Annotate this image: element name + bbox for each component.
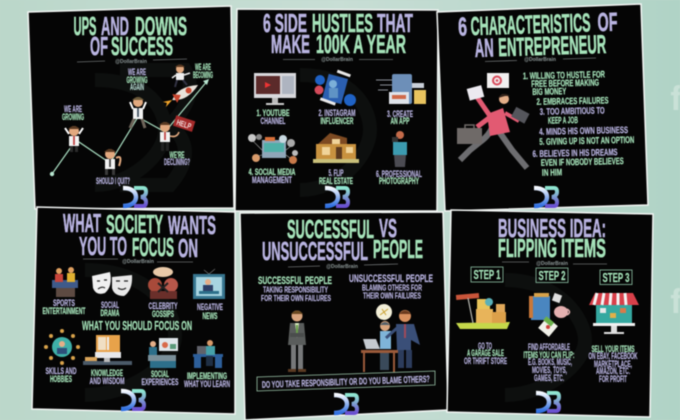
figure: successful man (288, 310, 306, 372)
panel: flipping items (447, 210, 653, 417)
watermark logo (95, 70, 190, 185)
label: celebrity gossips (148, 301, 178, 319)
step 2 text: E.G. BOOKS, MUSIC, (528, 357, 572, 367)
title (458, 7, 619, 64)
label: instagram influencer: 2. INSTAGRAM (318, 108, 356, 118)
step 1 text: GO TO (478, 341, 492, 351)
step 1 text (464, 341, 507, 366)
handle: @DollarBrain (115, 59, 147, 65)
panel: ups and downs of success: GROWING (62, 112, 84, 122)
icon: online shop (589, 293, 639, 334)
title (263, 8, 413, 59)
logo (334, 395, 357, 413)
help sign (173, 115, 195, 132)
label: skills and hobbies: HOBBIES (50, 374, 72, 384)
label: social media management (248, 167, 296, 185)
label: professional photography: PHOTOGRAPHY (379, 176, 419, 186)
icon: house (313, 133, 359, 163)
icon: briefcase (457, 125, 482, 144)
step 2 text: ITEMS YOU CAN FLIP: (524, 350, 574, 360)
label: we are becoming (193, 62, 213, 80)
step 2 text: FIND AFFORDABLE (528, 342, 570, 352)
step 3 text (588, 344, 638, 384)
icon: target card (487, 73, 509, 88)
title: THAT (377, 8, 413, 38)
label: sports entertainment: ENTERTAINMENT (42, 306, 86, 316)
figure on rocket (172, 64, 190, 87)
label: social drama (100, 300, 120, 318)
label: we are growing again: WE ARE (128, 67, 146, 77)
label: instagram influencer: INFLUENCER (320, 116, 354, 126)
numbered list of characteristics: 4. MINDS HIS OWN BUSINESS (539, 125, 628, 138)
help sign: HELP (175, 118, 193, 131)
step 3 text: MARKETPLACE, (594, 359, 632, 369)
icon: garage sale boxes (456, 293, 510, 329)
label: skills and hobbies: SKILLS AND (46, 366, 77, 376)
label: celebrity gossips: GOSSIPS (152, 309, 174, 319)
icon: sports fans (52, 267, 78, 297)
logo (123, 188, 146, 206)
chart line: ups and downs (50, 79, 209, 176)
numbered list of characteristics: IN HIM (542, 167, 562, 179)
title: VS (379, 213, 397, 243)
icon: celebrity gossip (148, 267, 178, 299)
title: FOCUS (132, 232, 174, 262)
step 2 heading (536, 268, 568, 283)
unsuccessful column heading: BLAMING OTHERS FOR (362, 282, 422, 292)
numbered list of characteristics: 2. EMBRACES FAILURES (536, 95, 609, 108)
label: flip real estate (319, 168, 353, 186)
logo (121, 391, 144, 409)
label: create an app (387, 109, 413, 126)
title (498, 213, 606, 263)
label: knowledge and wisdom (90, 368, 124, 386)
title: 6 SIDE (263, 8, 307, 38)
label: flip real estate: 5. FLIP (328, 168, 344, 178)
step 1 heading (471, 267, 503, 282)
label: knowledge and wisdom: AND WISDOM (90, 376, 124, 386)
label: sports entertainment: SPORTS (53, 298, 75, 308)
title (74, 11, 187, 61)
numbered list of characteristics: 3. TOO AMBITIOUS TO (540, 105, 605, 118)
handle (502, 261, 607, 267)
title: ITEMS (561, 233, 606, 263)
handle: @DollarBrain (536, 261, 568, 267)
label: social media management: MANAGEMENT (252, 175, 292, 185)
title: SOCIETY (106, 209, 163, 239)
unsuccessful column heading: UNSUCCESSFUL PEOPLE (349, 273, 433, 285)
label: social experiences (142, 369, 178, 387)
label: social drama: SOCIAL (101, 300, 119, 310)
thought bubble (376, 304, 392, 320)
step 3 heading: STEP 3 (602, 270, 630, 285)
figure: running businessman (460, 94, 527, 168)
step 2 text: MOVIES, TOYS, (532, 365, 567, 375)
handle (283, 57, 393, 63)
unsuccessful column heading: THEIR OWN FAILURES (363, 290, 421, 300)
figure: should I quit (104, 149, 120, 175)
handle: @DollarBrain (321, 57, 353, 63)
step 2 text: GAMES, ETC. (534, 373, 564, 383)
icon: theatre masks (92, 272, 132, 296)
icon: items to flip (529, 293, 570, 337)
label: create an app: 3. CREATE (387, 109, 413, 119)
label: we are growing: WE ARE (64, 104, 82, 114)
label: negative news: NEWS (202, 311, 218, 321)
icon: instagram influencer (314, 70, 356, 106)
step 1 text: A GARAGE SALE (467, 348, 504, 358)
title: AND (101, 11, 129, 41)
title: AN (474, 32, 494, 63)
callout box: question: DO YOU TAKE RESPONSIBILITY OR DO YOU BLAME OTHERS? (262, 374, 430, 391)
icon: tablet (511, 107, 530, 124)
icon: skills ring (44, 329, 80, 365)
figure: blaming manager (386, 310, 420, 368)
label: social media management: 4. SOCIAL MEDIA (248, 167, 296, 177)
handle (77, 59, 187, 65)
label: we are growing again: AGAIN (130, 82, 144, 92)
handle (83, 259, 193, 265)
handle: @DollarBrain (122, 259, 154, 265)
successful column heading: SUCCESSFUL PEOPLE (258, 275, 332, 287)
title (262, 213, 423, 266)
label: celebrity gossips: CELEBRITY (148, 301, 178, 311)
label: youtube channel: 1. YOUTUBE (256, 108, 290, 118)
unsuccessful column heading (349, 273, 433, 300)
successful column heading: FOR THEIR OWN FAILURES (261, 293, 331, 303)
label: knowledge and wisdom: KNOWLEDGE (91, 368, 123, 378)
title (63, 208, 216, 263)
label: create an app: AN APP (390, 116, 410, 126)
callout box: question (257, 371, 435, 391)
panel: ups and downs of success: DECLINING? (164, 157, 190, 167)
title: ON (178, 233, 198, 263)
label: we are growing (62, 104, 84, 122)
handle (288, 264, 398, 270)
label: negative news (197, 302, 223, 321)
icon: social media management (248, 134, 298, 164)
label: we're declining: WE'RE (170, 150, 184, 160)
panel: successful vs unsuccessful: PEOPLE (373, 234, 423, 264)
label: implementing what you learn (184, 371, 230, 389)
step 3 text: AMAZON, ETC. (596, 366, 630, 376)
label: youtube channel (256, 108, 290, 126)
label: skills and hobbies (46, 366, 77, 384)
numbered list of characteristics: KEEP A JOB (548, 115, 578, 127)
watermark logo (300, 75, 370, 190)
subheading: what you should focus on: WHAT YOU SHOULD FOCUS ON (82, 318, 192, 333)
label: professional photography (376, 169, 422, 186)
figure: growing (65, 126, 83, 152)
step 2 heading: STEP 2 (538, 268, 566, 283)
label: social drama: DRAMA (100, 308, 120, 318)
step 2 text (524, 342, 574, 383)
label: negative news: NEGATIVE (197, 302, 223, 312)
title: OF (597, 7, 618, 37)
icon: photographer (392, 131, 407, 167)
step 3 text: FOR PROFIT (599, 374, 627, 384)
numbered list of characteristics: 6. BELIEVES IN HIS DREAMS (532, 147, 618, 160)
title: 100K A YEAR (316, 29, 406, 59)
label: we are becoming: WE ARE (195, 62, 211, 72)
label: professional photography: 6. PROFESSIONAL (376, 169, 422, 179)
panel: ups and downs of success (28, 6, 234, 209)
figure: blamed man at desk (361, 321, 398, 372)
numbered list of characteristics: 1. WILLING TO HUSTLE FOR (523, 69, 605, 82)
logo (325, 188, 348, 206)
panel: ups and downs of success: GROWING (126, 75, 148, 85)
step 3 text: SELL YOUR ITEMS (592, 344, 634, 354)
title: HUSTLES (312, 8, 373, 38)
icon: negative news tv (193, 269, 225, 299)
icon: implementing at desk (193, 340, 223, 368)
title: YOU TO (79, 231, 127, 261)
icon: social experiences (148, 338, 178, 368)
label: implementing what you learn: IMPLEMENTING (187, 371, 227, 381)
title: FLIPPING (498, 233, 557, 263)
label: sports entertainment (42, 298, 86, 316)
figure: growing again (130, 97, 146, 128)
panel: what society wants (32, 207, 235, 414)
watermark logo (85, 270, 175, 395)
numbered list of characteristics (523, 69, 635, 179)
panel: 6 side hustles (235, 8, 438, 211)
icon: youtube monitor (254, 73, 296, 105)
watermark logo (505, 280, 585, 395)
label: instagram influencer (318, 108, 356, 126)
icon: paper (467, 85, 484, 101)
label: we are growing again (126, 67, 148, 92)
title: UNSUCCESSFUL (262, 236, 368, 266)
title: WANTS (168, 210, 216, 240)
numbered list of characteristics: FREE BEFORE MAKING (531, 78, 599, 90)
title: 6 (458, 11, 468, 42)
title: UPS (74, 11, 96, 41)
title: DOWNS (135, 11, 187, 41)
label: flip real estate: REAL ESTATE (319, 176, 353, 186)
label: social experiences: EXPERIENCES (142, 377, 178, 387)
numbered list of characteristics: BIG MONEY (532, 86, 567, 98)
title: MAKE (271, 29, 310, 59)
logo (536, 393, 559, 411)
rocket (162, 81, 201, 109)
figure: declining with help sign (159, 122, 179, 151)
label: youtube channel: CHANNEL (260, 116, 286, 126)
title: SUCCESS (111, 31, 173, 61)
panel: ups and downs of success: SHOULD I QUIT? (96, 176, 130, 186)
label: social experiences: SOCIAL (151, 369, 169, 379)
title: OF (90, 31, 108, 61)
logo (534, 188, 557, 206)
title: SUCCESSFUL (287, 214, 374, 244)
numbered list of characteristics: EVEN IF NOBODY BELIEVES (541, 156, 624, 169)
step 1 text: OR THRIFT STORE (464, 356, 507, 366)
successful column heading: TAKING RESPONSIBILITY (263, 284, 328, 294)
step 1 heading: STEP 1 (474, 267, 500, 282)
panel: successful vs unsuccessful (240, 212, 448, 420)
label: we're declining (164, 150, 190, 167)
panel: ups and downs of success: BECOMING (193, 70, 213, 80)
title: WHAT (63, 208, 101, 238)
step 3 heading (600, 270, 632, 285)
handle: @DollarBrain (524, 57, 556, 63)
icon: app (376, 74, 426, 104)
handle: @DollarBrain (326, 264, 358, 270)
handle (485, 57, 596, 63)
panel: 6 characteristics (437, 4, 648, 211)
successful column heading (258, 275, 332, 303)
icon: books and knowledge (83, 335, 132, 365)
label: implementing what you learn: WHAT YOU LEARN (184, 379, 230, 389)
